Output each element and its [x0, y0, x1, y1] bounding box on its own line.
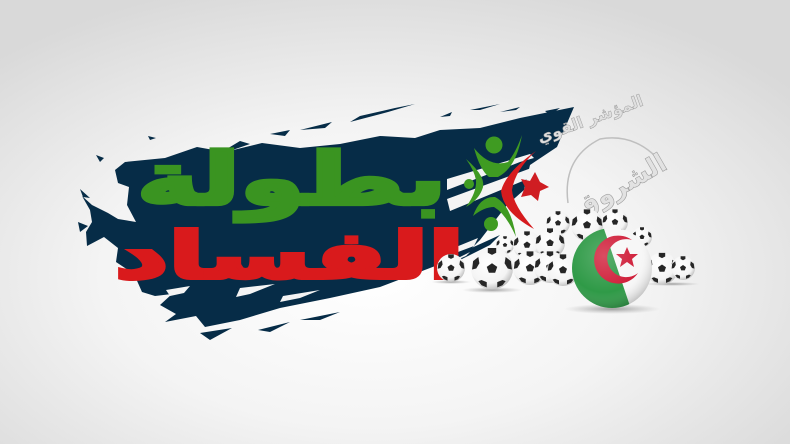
watermark logo: [535, 91, 672, 224]
logo: figures and crescent: [464, 135, 549, 237]
icon: green figure left: [464, 159, 483, 207]
ball shadows: [431, 280, 700, 314]
watermark text: المؤشر القوي: [535, 91, 646, 148]
football pile: [437, 209, 695, 290]
white brush streaks: [166, 154, 534, 302]
brush stroke: [78, 104, 574, 340]
icon: red crescent: [501, 151, 536, 229]
brush flecks: [78, 104, 560, 340]
title: red word: الفساد: [115, 218, 464, 294]
icon: green figure top: [474, 135, 522, 177]
watermark name: الشروق: [570, 148, 672, 224]
watermark arc: [567, 138, 667, 203]
flag star: [616, 247, 638, 267]
title: green word: بطولة: [137, 138, 446, 222]
flag crescent: [594, 236, 638, 284]
icon: green figure bottom: [473, 197, 516, 237]
icon: red star: [521, 172, 549, 201]
Algerian flag ball: [572, 228, 652, 308]
